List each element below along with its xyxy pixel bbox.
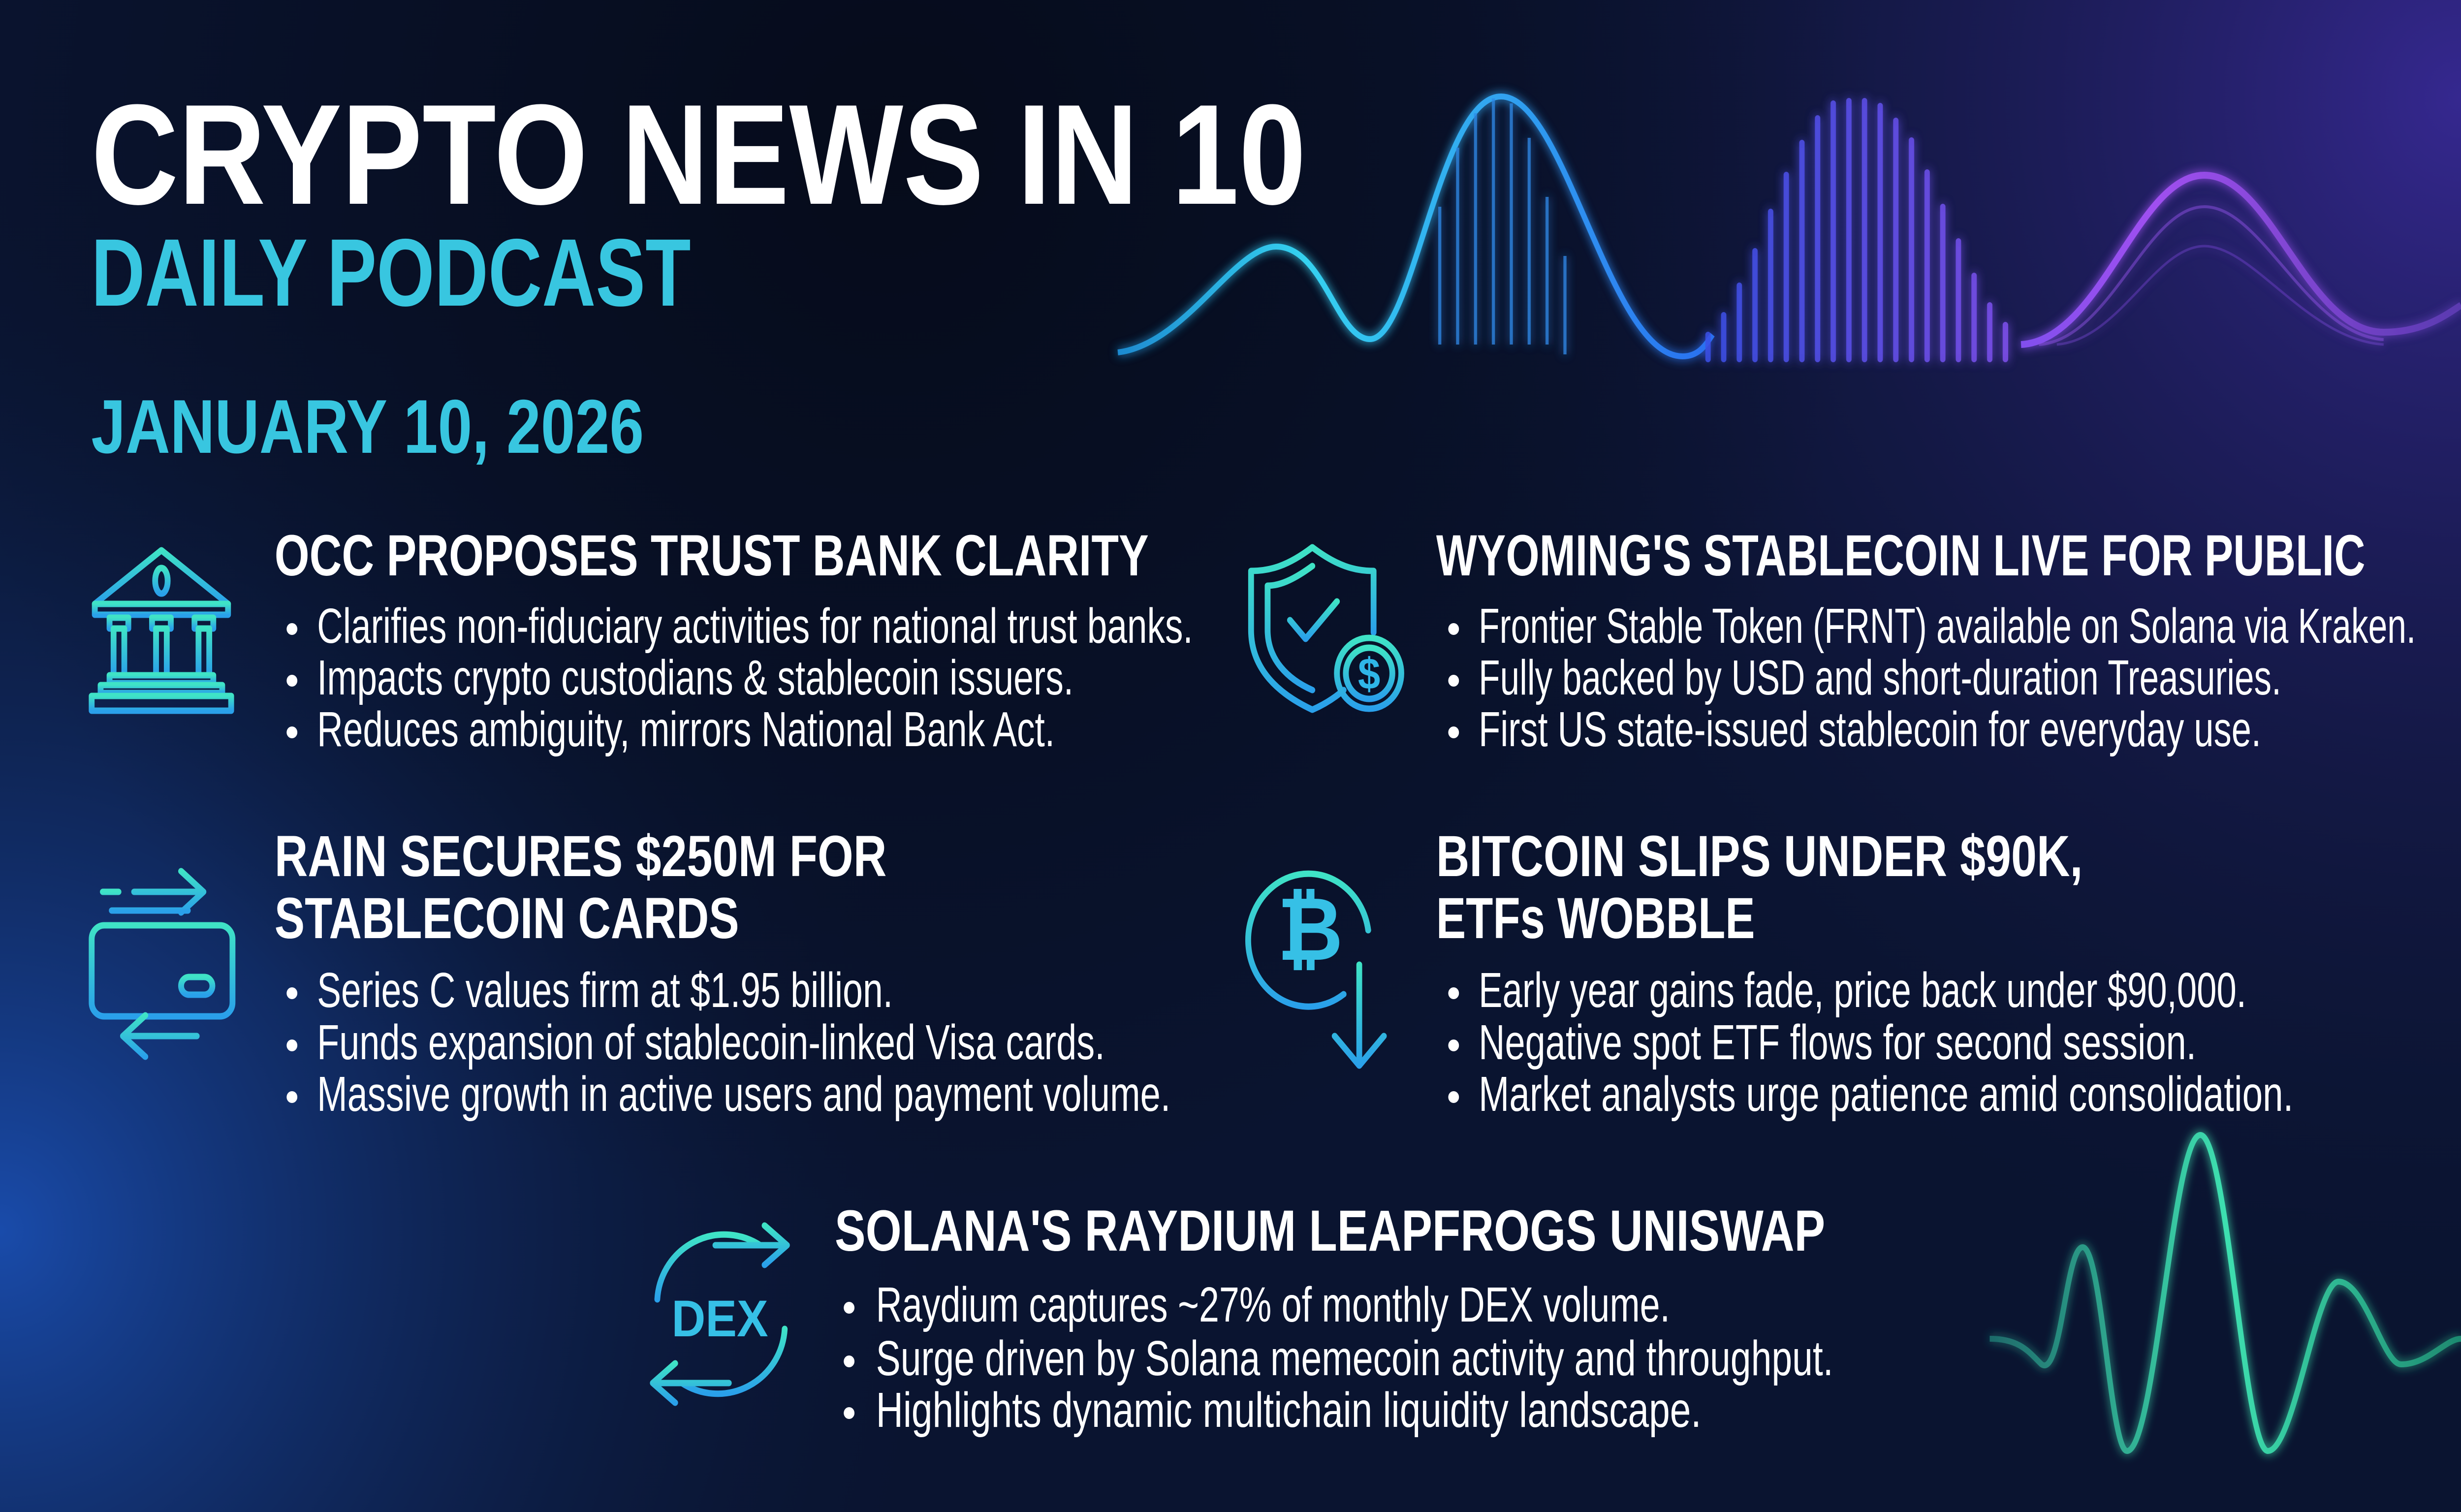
bullets: Reduces ambiguity, mirrors National Bank Act.: [317, 702, 1055, 757]
title: CRYPTO NEWS IN 10: [91, 74, 1306, 234]
icon: card with arrows: [92, 871, 232, 1057]
bullets: Market analysts urge patience amid consolidation.: [1479, 1067, 2293, 1122]
bullets: [844, 1278, 1833, 1438]
bullets: [1448, 963, 2293, 1122]
bullets: Series C values firm at $1.95 billion.: [317, 963, 893, 1018]
icon: shield with coin: [1251, 547, 1401, 710]
bullets: Impacts crypto custodians & stablecoin issuers.: [317, 651, 1073, 705]
panel: Bitcoin slips: ETFs WOBBLE: [1436, 885, 1755, 950]
sound wave: header decoration: [1118, 96, 2461, 359]
panel: Wyoming stablecoin: [1251, 523, 2416, 757]
icon: DEX swap: [653, 1226, 787, 1403]
heading: SOLANA'S RAYDIUM LEAPFROGS UNISWAP: [835, 1198, 1825, 1263]
panel: Bitcoin slips: ₿: [1277, 880, 1343, 979]
bullets: [286, 599, 1193, 757]
bullets: First US state-issued stablecoin for everyday use.: [1479, 702, 2261, 757]
bullets: Raydium captures ~27% of monthly DEX volume.: [876, 1278, 1670, 1332]
bullets: Massive growth in active users and payment volume.: [317, 1067, 1170, 1122]
subtitle: DAILY PODCAST: [91, 219, 691, 326]
bullets: [286, 963, 1170, 1122]
panel: Rain cards: [92, 823, 1170, 1122]
panel: Raydium DEX: [653, 1198, 1833, 1438]
bullets: Highlights dynamic multichain liquidity landscape.: [876, 1383, 1702, 1438]
panel: Wyoming stablecoin: $: [1358, 649, 1380, 699]
bullets: Negative spot ETF flows for second session.: [1479, 1015, 2196, 1070]
heading: OCC PROPOSES TRUST BANK CLARITY: [275, 523, 1149, 588]
heading: BITCOIN SLIPS UNDER $90K,: [1436, 823, 2082, 888]
panel: OCC trust bank: [92, 523, 1193, 757]
panel: Bitcoin slips: [1248, 823, 2293, 1122]
bullets: [1448, 599, 2416, 757]
icon: bank: [92, 550, 231, 711]
icon: bitcoin with down arrow: [1248, 874, 1384, 1066]
sound wave: bottom right green: [1990, 1135, 2461, 1451]
bullets: Early year gains fade, price back under $90,000.: [1479, 963, 2246, 1018]
bullets: Funds expansion of stablecoin-linked Visa cards.: [317, 1015, 1105, 1070]
bullets: Clarifies non-fiduciary activities for national trust banks.: [317, 599, 1193, 654]
heading: RAIN SECURES $250M FOR: [275, 823, 886, 888]
bullets: Surge driven by Solana memecoin activity and throughput.: [876, 1331, 1833, 1386]
panel: Rain cards: STABLECOIN CARDS: [275, 885, 739, 950]
date: JANUARY 10, 2026: [91, 384, 644, 469]
panel: Raydium DEX: DEX: [672, 1290, 768, 1348]
